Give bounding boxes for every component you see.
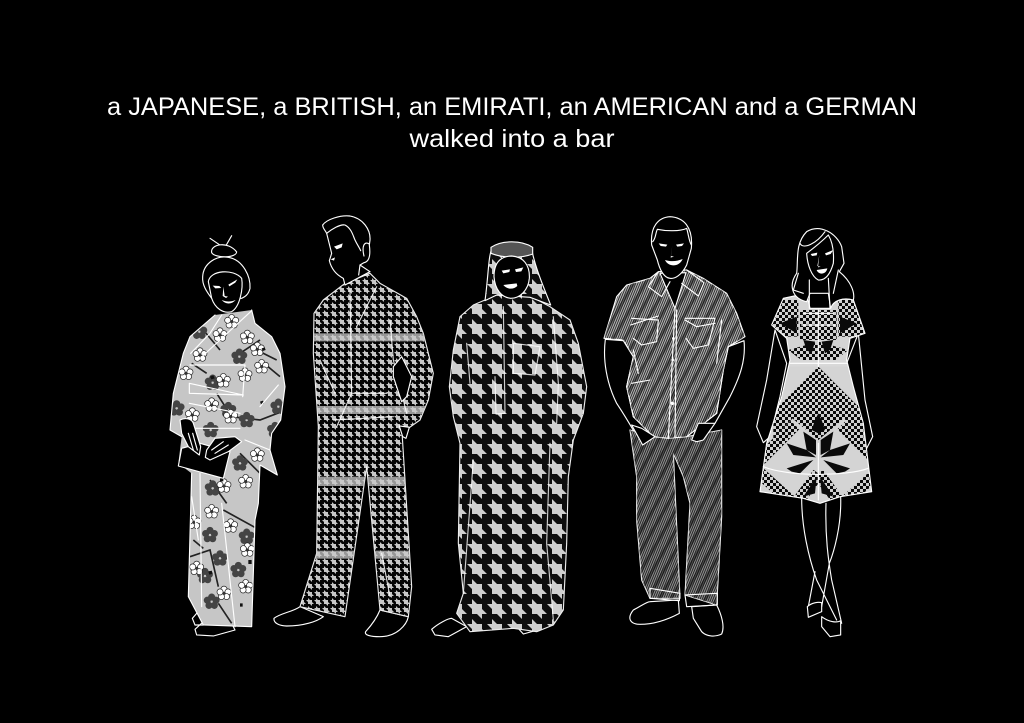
figure: British man in houndstooth suit <box>274 216 440 637</box>
sandals <box>432 618 540 637</box>
sandals <box>192 613 235 636</box>
houndstooth suit <box>300 273 440 617</box>
hands and clutch bag <box>178 419 242 478</box>
title: a JAPANESE, a BRITISH, an EMIRATI, an AMERICAN and a GERMAN <box>107 93 917 121</box>
figure: Emirati man in thobe and ghutra <box>432 242 587 637</box>
figure: Japanese woman in kimono <box>169 236 286 636</box>
figure: American man in denim <box>604 217 745 636</box>
kimono with cherry blossom pattern <box>169 310 286 627</box>
shoes <box>274 607 408 637</box>
figure: German woman in embroidered dress <box>757 229 877 637</box>
open collar and neck <box>660 273 686 308</box>
denim shirt <box>604 270 745 438</box>
houndstooth thobe <box>449 293 587 632</box>
hand in pocket <box>399 426 409 438</box>
head and hair <box>792 229 854 308</box>
ghutra headdress <box>485 242 551 305</box>
head <box>651 217 692 278</box>
denim trousers <box>630 430 722 607</box>
gap between arm and body <box>393 357 412 402</box>
arms <box>757 330 873 452</box>
arms <box>605 339 744 445</box>
high-heeled shoes <box>807 602 841 637</box>
title <box>107 93 917 153</box>
head and hair <box>323 216 370 285</box>
title: walked into a bar <box>408 125 614 153</box>
hands in pockets <box>632 423 715 445</box>
shoes <box>630 600 723 636</box>
legs <box>802 497 842 623</box>
embroidered dress <box>760 293 877 503</box>
head, bun and hair sticks <box>203 236 250 312</box>
